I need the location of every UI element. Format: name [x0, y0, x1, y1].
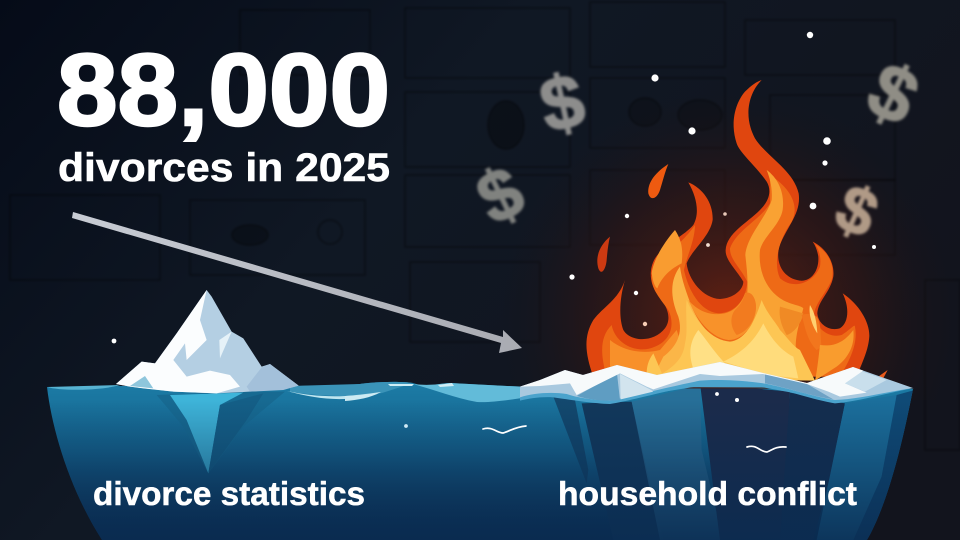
- fire glow: [480, 80, 960, 400]
- right water band: [413, 383, 550, 402]
- outer flame: [586, 80, 869, 377]
- blue rim: [520, 383, 914, 404]
- diagonal arrow: [72, 212, 522, 353]
- floating dollar signs: [465, 44, 932, 252]
- left iceberg: [116, 290, 299, 473]
- ember and snow particles: [112, 32, 876, 428]
- underwater mass: [157, 392, 285, 473]
- water teal surface band: [290, 382, 413, 396]
- left inner tongue: [653, 267, 730, 377]
- lower left orange: [610, 330, 683, 377]
- right patches: [780, 307, 803, 335]
- headline: 88,000: 88,000: [57, 33, 390, 147]
- subheading: divorces in 2025: [58, 146, 390, 190]
- water pale highlight: [287, 391, 381, 399]
- stray flame sparks: [648, 164, 668, 198]
- snow: [116, 290, 240, 393]
- lower flame layers: [610, 230, 854, 381]
- bird marks: [483, 426, 786, 452]
- left tongue light piece: [652, 230, 682, 288]
- surface sparkle: [388, 383, 454, 387]
- submerged facets: [553, 397, 588, 483]
- depth fade: [53, 410, 902, 540]
- rim filler under ice: [653, 377, 813, 397]
- label: household conflict: household conflict: [558, 475, 857, 512]
- floating dollar signs: $: [825, 169, 889, 252]
- water body: [47, 382, 913, 540]
- left rim highlight: [47, 385, 120, 390]
- darker patch: [731, 293, 756, 335]
- snow cap: [520, 362, 867, 397]
- upper flame layers: [586, 80, 888, 378]
- label: divorce statistics: divorce statistics: [93, 475, 365, 512]
- floating dollar signs: $: [465, 151, 536, 240]
- right iceberg base: [40, 362, 920, 540]
- shaded ice: [520, 362, 913, 401]
- yellow core: [653, 300, 815, 381]
- mid orange flame: [602, 175, 856, 377]
- pale highlights: [690, 330, 727, 373]
- orange band below pocket: [688, 293, 756, 340]
- flame: [586, 80, 888, 381]
- shaded ice: [116, 290, 299, 393]
- floating dollar signs: $: [855, 44, 932, 142]
- floating dollar signs: $: [533, 58, 592, 150]
- main tongue light core: [743, 170, 803, 360]
